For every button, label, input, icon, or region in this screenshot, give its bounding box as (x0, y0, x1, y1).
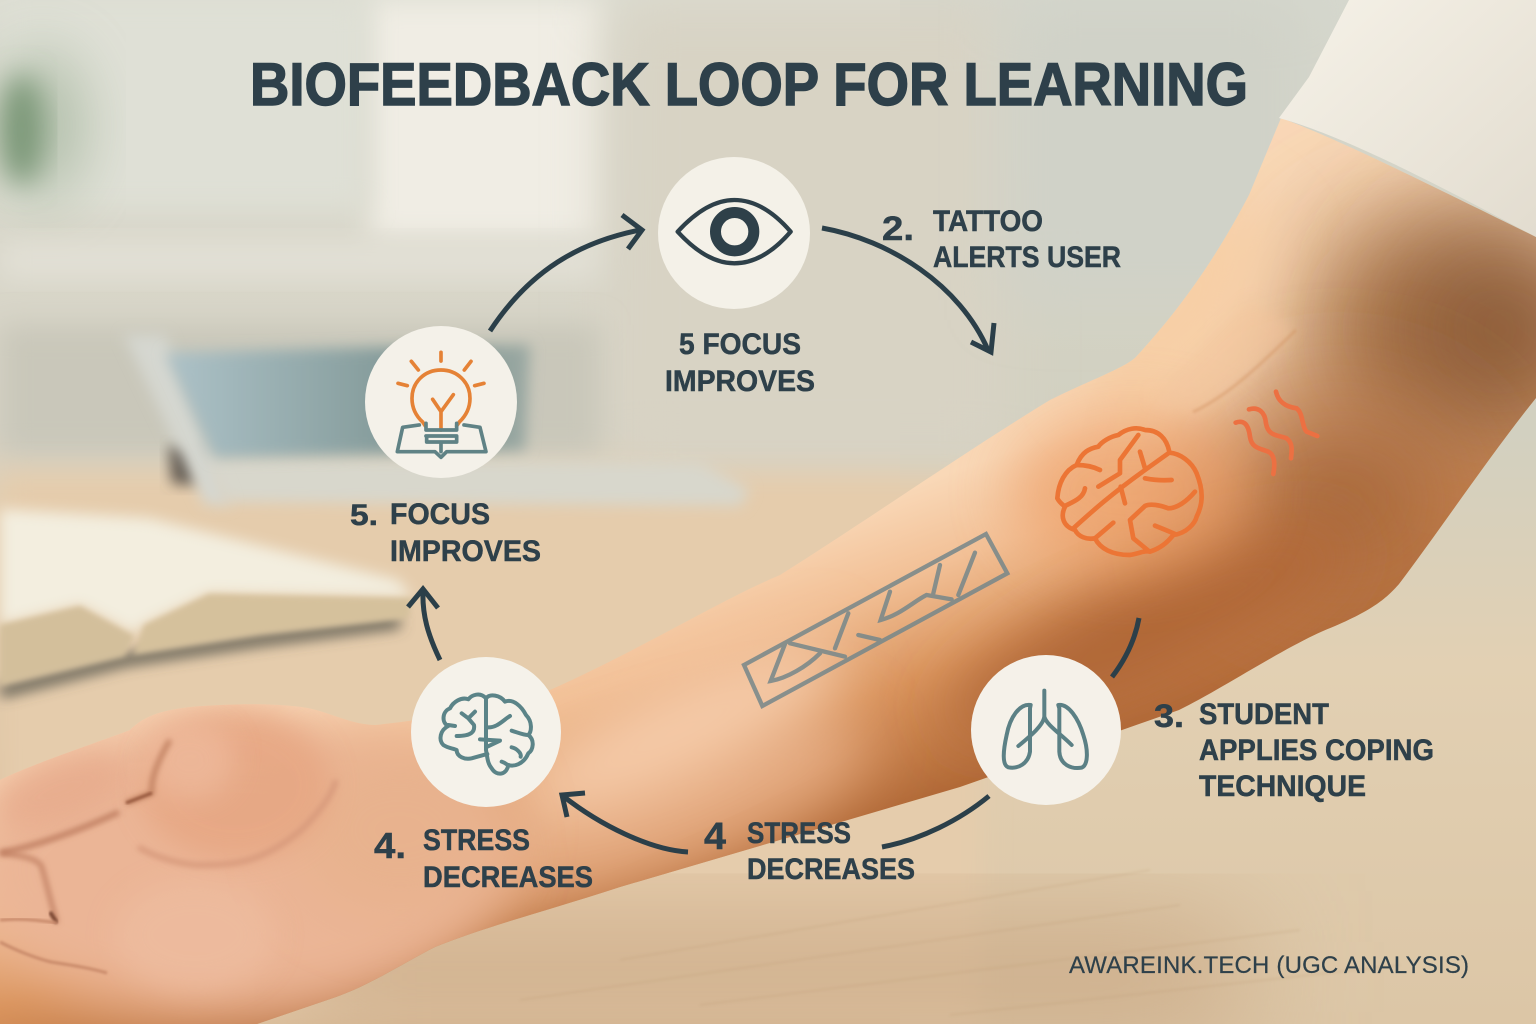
step: teal brain icon circle (411, 657, 561, 807)
label: 5 focus improves under eye (665, 328, 815, 398)
title: BIOFEEDBACK LOOP FOR LEARNING (250, 51, 1248, 118)
label: step 3 student applies coping technique: TECHNIQUE (1199, 770, 1366, 803)
label: 4 stress decreases on forearm: 4 (704, 816, 726, 858)
label: step 4 stress decreases at wrist: STRESS (423, 824, 530, 857)
label: step 5 focus improves: FOCUS (390, 498, 490, 531)
table wood grain (520, 870, 1400, 1015)
label: 4 stress decreases on forearm: DECREASES (747, 853, 915, 886)
label: step 2 tattoo alerts user: 2. (882, 210, 914, 248)
arrow: tattoo to lungs (1112, 618, 1139, 677)
white shirt sleeve (1279, 0, 1536, 237)
label: step 4 stress decreases at wrist: 4. (374, 825, 406, 866)
label: step 3 student applies coping technique (1154, 698, 1434, 803)
arrow: eye to tattoo (822, 228, 994, 352)
arrow: lungs to stress label (882, 796, 989, 847)
blurred open book (0, 509, 413, 692)
label: step 3 student applies coping technique: 3. (1154, 698, 1184, 734)
label: step 5 focus improves: IMPROVES (390, 535, 541, 568)
tattoo: orange brain (1057, 428, 1202, 555)
step: lightbulb and book icon circle (365, 326, 517, 478)
label: step 4 stress decreases at wrist (374, 824, 593, 894)
label: step 3 student applies coping technique: APPLIES COPING (1199, 734, 1434, 767)
label: step 4 stress decreases at wrist: DECREASES (423, 861, 593, 894)
label: 5 focus improves under eye: IMPROVES (665, 365, 815, 398)
tattoo: orange stress waves (1236, 392, 1317, 474)
step: lungs icon circle (971, 655, 1121, 805)
label: step 2 tattoo alerts user (882, 205, 1121, 274)
label: 4 stress decreases on forearm: STRESS (747, 817, 851, 850)
label: step 5 focus improves (350, 498, 541, 568)
step: eye icon circle (658, 157, 810, 309)
label: 5 focus improves under eye: 5 FOCUS (679, 328, 801, 361)
label: step 5 focus improves: 5. (350, 499, 378, 532)
label: 4 stress decreases on forearm (704, 816, 915, 886)
tattoo: grey stress bar (744, 534, 1007, 706)
blurred laptop (124, 335, 750, 506)
label: step 2 tattoo alerts user: TATTOO (933, 205, 1043, 238)
label: step 3 student applies coping technique: STUDENT (1199, 698, 1329, 731)
arrow: brain to focus (408, 589, 440, 660)
arrow: focus to eye (490, 215, 642, 331)
arrow: stress label to brain (562, 793, 688, 852)
label: step 2 tattoo alerts user: ALERTS USER (933, 241, 1121, 274)
source credit: AWAREINK.TECH (UGC ANALYSIS) (1069, 952, 1469, 979)
